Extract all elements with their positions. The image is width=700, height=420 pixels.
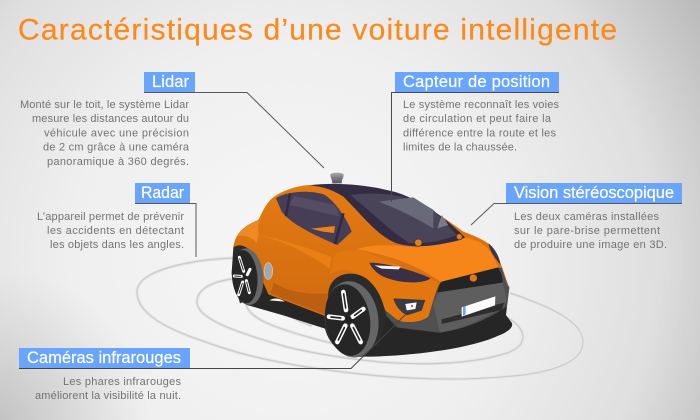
front wheel xyxy=(320,278,383,361)
callout: Radar xyxy=(37,183,196,257)
text: Capteur de position: Le système reconnaît les voies xyxy=(403,99,560,111)
text: Lidar: panoramique à 360 degrés. xyxy=(47,156,189,168)
front fender highlight xyxy=(330,250,438,322)
windshield cameras xyxy=(415,234,462,246)
heading: Caméras infrarouges: Caméras infrarouges xyxy=(27,349,181,367)
car body xyxy=(233,185,508,322)
heading: Radar: Radar xyxy=(141,184,184,202)
text: Lidar: Monté sur le toit, le système Lidar xyxy=(20,99,189,111)
hood highlight xyxy=(357,237,498,282)
sill light xyxy=(269,299,285,302)
callout: Vision stéréoscopique xyxy=(471,183,682,251)
wheel arches xyxy=(232,245,265,303)
text: Capteur de position: différence entre la route et les xyxy=(403,128,556,140)
text: Caméras infrarouges xyxy=(35,376,182,402)
callout: Lidar xyxy=(20,72,324,168)
badge xyxy=(470,274,477,282)
text: Vision stéréoscopique: Les deux caméras installées xyxy=(514,211,660,223)
text: Caméras infrarouges: améliorent la visibilité la nuit. xyxy=(35,390,181,402)
title: Caractéristiques d’une voiture intelligente xyxy=(18,14,617,46)
fuel cap xyxy=(264,263,273,279)
connector: Radar xyxy=(135,204,196,257)
rear wheel xyxy=(230,247,266,306)
text: Lidar: mesure les distances autour du xyxy=(32,113,189,125)
car illustration xyxy=(230,173,512,361)
licence plate xyxy=(462,296,495,317)
callout: Caméras infrarouges xyxy=(19,315,405,402)
text: Capteur de position xyxy=(403,99,560,154)
connector: Caméras infrarouges xyxy=(19,315,405,368)
wing mirror xyxy=(311,226,335,233)
heading: Lidar: Lidar xyxy=(152,73,189,91)
right headlight xyxy=(488,243,501,265)
connector: Capteur de position xyxy=(392,92,559,202)
text: Capteur de position: limites de la chaussée. xyxy=(403,142,517,154)
ground sensor rings xyxy=(137,258,583,379)
front bumper xyxy=(382,267,509,333)
shoulder line xyxy=(259,235,332,268)
text: Vision stéréoscopique: sur le pare-brise permettent xyxy=(514,225,660,237)
text: Radar: les accidents en détectant xyxy=(47,225,184,237)
rear fender highlight xyxy=(237,221,259,243)
heading: Vision stéréoscopique: Vision stéréoscopique xyxy=(514,184,674,202)
text: Caméras infrarouges: Les phares infrarouges xyxy=(63,376,182,388)
text: Vision stéréoscopique xyxy=(514,211,667,251)
left headlight xyxy=(369,263,431,282)
car shadow and underside xyxy=(233,260,512,357)
callout: Capteur de position xyxy=(392,72,560,202)
lidar sensor xyxy=(330,173,344,183)
text: Radar xyxy=(37,211,184,251)
text: Vision stéréoscopique: de produire une image en 3D. xyxy=(514,239,667,251)
infrared camera lamp xyxy=(393,298,425,315)
text: Lidar xyxy=(20,99,190,168)
heading: Capteur de position: Capteur de position xyxy=(403,73,550,91)
text: Lidar: de 2 cm grâce à une caméra xyxy=(43,142,190,154)
text: Lidar: véhicule avec une précision xyxy=(44,128,189,140)
lower door shade xyxy=(271,283,329,315)
side window xyxy=(276,192,352,245)
upper grille xyxy=(437,267,503,292)
heading: Lidar xyxy=(144,72,195,92)
text: Capteur de position: de circulation et peut faire la xyxy=(403,113,552,125)
text: Radar: les objets dans les angles. xyxy=(50,239,184,251)
lower grille xyxy=(433,283,507,333)
connector: Lidar xyxy=(144,92,324,168)
text: Radar: L’appareil permet de prévenir xyxy=(37,211,184,223)
connector: Vision stéréoscopique xyxy=(471,204,682,225)
windshield and roof xyxy=(310,184,465,246)
